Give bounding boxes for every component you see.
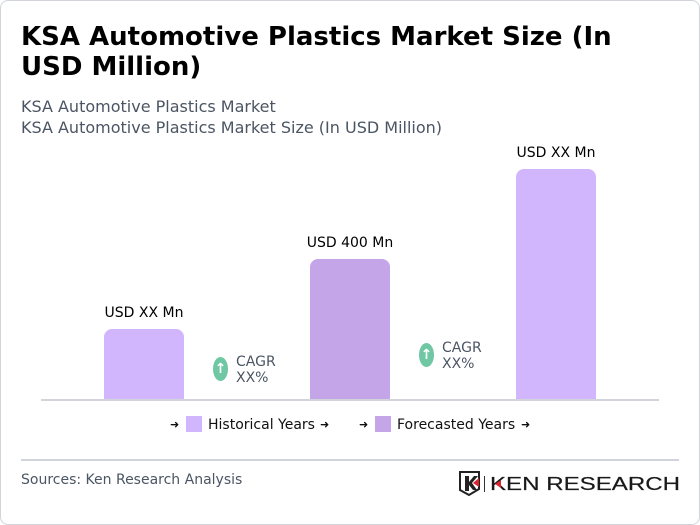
x axis [41, 399, 659, 401]
cagr label 2: XX% [442, 356, 474, 372]
legend: forecasted years [359, 416, 530, 433]
title: KSA Automotive Plastics Market Size (In [21, 22, 612, 52]
cagr label 2: CAGR [442, 340, 482, 356]
icon: shield [460, 472, 479, 495]
legend [170, 416, 530, 433]
cagr label 1: XX% [236, 370, 268, 386]
value label: bar 2: USD 400 Mn [307, 235, 393, 251]
cagr label 1: CAGR [236, 354, 276, 370]
value label: bar 1: USD XX Mn [105, 305, 183, 321]
subtitle [21, 97, 442, 137]
icon: cagr arrow 1 [213, 357, 228, 381]
bar 1 [104, 329, 184, 399]
legend: historical years: Historical Years [208, 417, 315, 433]
legend: forecasted years: ➜ [521, 418, 530, 431]
legend: forecasted years: ➜ [359, 418, 368, 431]
cagr label 1 [236, 354, 276, 386]
cagr label 2 [442, 340, 482, 372]
source note: Sources: Ken Research Analysis [21, 472, 242, 488]
legend: forecasted years: Forecasted Years [397, 417, 515, 433]
legend: historical years: ➜ [170, 418, 179, 431]
legend: historical years: ➜ [320, 418, 329, 431]
icon: cagr arrow 1: ↑ [215, 361, 226, 377]
bar chart [41, 145, 659, 401]
title: USD Million) [21, 52, 201, 82]
logo: ken research [459, 471, 680, 496]
icon: cagr arrow 2 [419, 343, 434, 367]
bar 2 [310, 259, 390, 399]
subtitle: KSA Automotive Plastics Market [21, 97, 276, 116]
logo text: KEN RESEARCH [490, 474, 680, 494]
value label: bar 3: USD XX Mn [517, 145, 595, 161]
icon: cagr arrow 2: ↑ [421, 347, 432, 363]
subtitle: KSA Automotive Plastics Market Size (In USD Million) [21, 118, 442, 137]
title [21, 22, 612, 82]
legend: historical years [170, 416, 329, 433]
bar 3 [516, 169, 596, 399]
